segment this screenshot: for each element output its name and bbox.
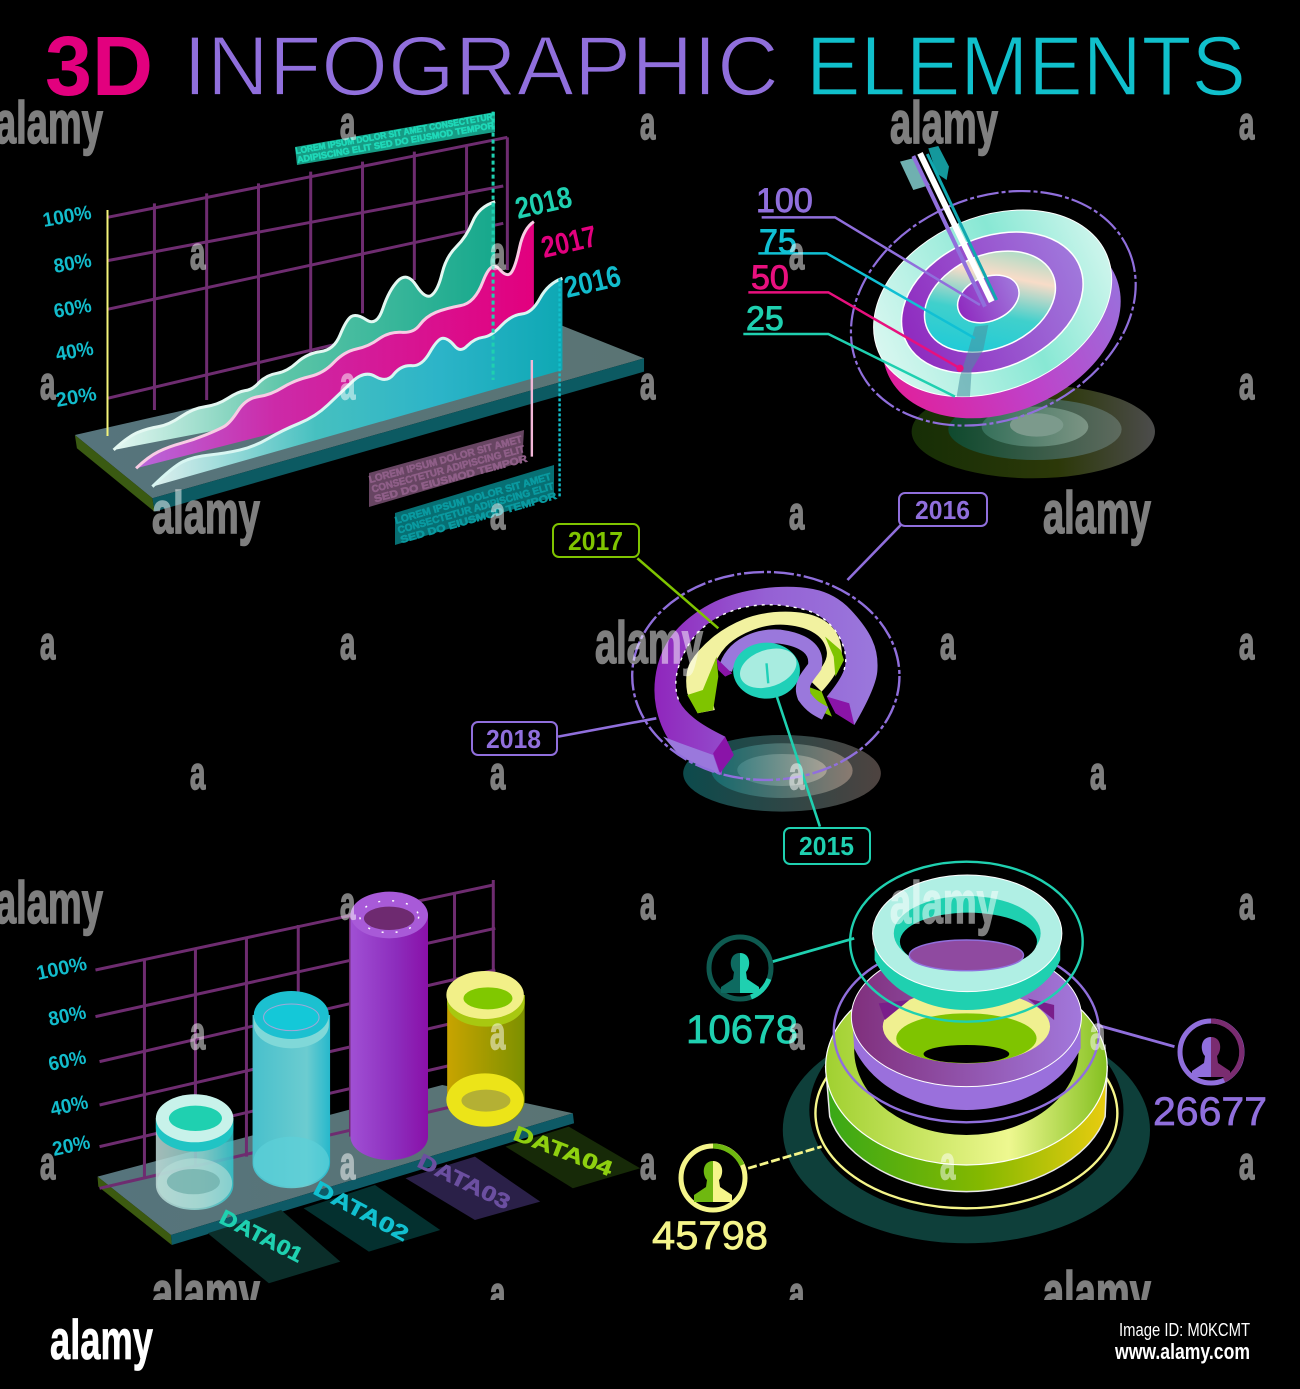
callout 10678: 10678	[686, 1008, 798, 1052]
bar chart grid	[95, 880, 495, 1188]
footer strip	[0, 1300, 1300, 1389]
watermark pattern: a	[490, 229, 506, 280]
watermark pattern: a	[640, 879, 656, 930]
watermark pattern: alamy	[1043, 1260, 1151, 1326]
bar chart base plate	[98, 1085, 574, 1245]
watermark pattern: a	[40, 1139, 56, 1190]
watermark pattern: a	[789, 749, 805, 800]
outer arc 2018/2016	[654, 587, 878, 775]
leader lines	[493, 112, 560, 497]
watermark pattern: alamy	[890, 870, 998, 936]
watermark pattern: a	[789, 229, 805, 280]
callout 26677	[1153, 1021, 1267, 1134]
year labels: 2016	[561, 260, 624, 305]
cylinder 3	[350, 892, 428, 1160]
axis labels	[41, 202, 98, 412]
caption 2017: SED DO EIUSMOD TEMPOR	[373, 453, 529, 505]
caption 2017: LOREM IPSUM DOLOR SIT AMET	[368, 434, 523, 486]
watermark pattern: a	[340, 619, 356, 670]
cylinder 1	[156, 1094, 233, 1210]
website: www.alamy.com	[1114, 1339, 1250, 1364]
panel: bar chart	[34, 880, 640, 1283]
watermark pattern: a	[340, 879, 356, 930]
callout 2015	[784, 828, 870, 864]
watermark pattern: a	[1239, 359, 1255, 410]
watermark pattern: a	[789, 489, 805, 540]
donut orbit ring	[632, 572, 899, 780]
year labels: 2018	[512, 181, 575, 226]
axis labels: 60%	[46, 1046, 88, 1076]
watermark pattern: alamy	[890, 90, 998, 156]
panel: bar chart: DATA01	[216, 1206, 307, 1267]
callout 2017	[553, 524, 639, 557]
watermark pattern: a	[40, 359, 56, 410]
bottom tier	[826, 965, 1107, 1192]
watermark pattern: a	[940, 619, 956, 670]
target shadow	[912, 385, 1155, 478]
watermark pattern: a	[340, 99, 356, 150]
watermark pattern: alamy	[595, 610, 703, 676]
axis labels	[34, 953, 92, 1161]
inner arc 2016	[717, 636, 825, 713]
year labels: 2017	[538, 220, 600, 265]
caption 2016: LOREM IPSUM DOLOR SIT AMET	[394, 472, 553, 527]
panel: bar chart: DATA03	[414, 1150, 514, 1214]
axis labels: 40%	[48, 1091, 90, 1121]
watermark pattern: a	[640, 359, 656, 410]
arrow	[900, 146, 997, 307]
watermark pattern: a	[340, 359, 356, 410]
leader lines	[743, 217, 980, 397]
callout 45798: 45798	[652, 1214, 768, 1258]
callout 26677: 26677	[1153, 1090, 1267, 1134]
caption 2016: SED DO EIUSMOD TEMPOR	[399, 491, 559, 546]
axis labels: 40%	[54, 338, 95, 366]
callout lines	[558, 525, 901, 827]
watermark pattern: a	[1239, 879, 1255, 930]
watermark pattern: a	[490, 489, 506, 540]
watermark pattern: a	[640, 99, 656, 150]
value labels	[746, 182, 813, 338]
watermark pattern: a	[1090, 749, 1106, 800]
watermark pattern: a	[640, 1139, 656, 1190]
title: ELEMENTS	[806, 19, 1246, 113]
watermark pattern: a	[789, 1009, 805, 1060]
area chart grid	[108, 137, 507, 410]
watermark pattern: a	[190, 229, 206, 280]
callout 2016	[899, 493, 987, 526]
middle tier	[851, 947, 1081, 1110]
watermark pattern: a	[490, 749, 506, 800]
donut shadow	[683, 735, 881, 812]
callout 10678	[686, 937, 798, 1052]
top tier	[873, 875, 1062, 1010]
caption 2018: LOREM IPSUM DOLOR SIT AMET CONSECTETUR	[295, 111, 494, 156]
title: INFOGRAPHIC	[183, 19, 779, 113]
caption 2016: CONSECTETUR ADIPISCING ELIT	[397, 481, 555, 536]
watermark pattern: a	[940, 1139, 956, 1190]
axis labels: 80%	[46, 1001, 88, 1031]
value labels: 100	[756, 182, 813, 220]
value labels: 75	[759, 223, 797, 261]
title	[45, 19, 1246, 113]
cylinder 4	[446, 971, 525, 1127]
watermark pattern: a	[1239, 99, 1255, 150]
purple orbit ring	[834, 941, 1099, 1122]
callout 2017: 2017	[568, 526, 623, 556]
series 2017 area	[136, 222, 534, 468]
axis labels: 100%	[41, 202, 93, 232]
title: 3D	[45, 19, 153, 113]
watermark pattern: a	[190, 1009, 206, 1060]
stack base shadow	[783, 1003, 1150, 1243]
target orbit ring	[814, 149, 1172, 468]
panel: target	[743, 146, 1172, 478]
series 2018 area	[114, 202, 495, 450]
caption 2016	[394, 465, 559, 546]
panel: donut chart	[472, 493, 987, 864]
watermark pattern: a	[190, 749, 206, 800]
watermark pattern: a	[789, 1269, 805, 1320]
image id: Image ID: M0KCMT	[1119, 1320, 1250, 1340]
bar labels on floor	[208, 1127, 640, 1283]
series 2016 area	[152, 278, 562, 487]
watermark pattern: a	[40, 619, 56, 670]
watermark pattern: a	[1090, 1009, 1106, 1060]
callout 2015: 2015	[799, 831, 854, 861]
panel: area chart	[41, 111, 644, 546]
axis labels: 100%	[34, 953, 89, 985]
footer logo: alamy	[50, 1308, 153, 1371]
callout 45798	[652, 1146, 768, 1258]
cylinder 2	[253, 991, 330, 1188]
value labels: 50	[751, 259, 789, 297]
target dish	[845, 175, 1150, 453]
axis labels: 20%	[50, 1131, 92, 1161]
panel: bar chart: DATA02	[310, 1177, 412, 1246]
teal orbit ring	[850, 862, 1083, 1022]
caption 2018: ADIPISCING ELIT SED DO EIUSMOD TEMPOR	[296, 120, 495, 165]
watermark pattern: a	[490, 1269, 506, 1320]
caption 2017	[368, 430, 529, 507]
yellow axis line	[106, 210, 108, 436]
panel: bar chart: DATA04	[510, 1122, 616, 1181]
middle arc 2017	[686, 612, 844, 717]
year labels	[512, 181, 624, 305]
axis labels: 60%	[52, 295, 93, 323]
axis labels: 80%	[52, 250, 93, 278]
watermark pattern: alamy	[1043, 480, 1151, 546]
callout lines	[748, 938, 1174, 1168]
callout 2016: 2016	[915, 495, 970, 525]
panel: stacked rings	[652, 862, 1267, 1258]
watermark pattern: alamy	[152, 1260, 260, 1326]
axis labels: 20%	[54, 383, 98, 412]
watermark pattern: a	[1239, 619, 1255, 670]
callout 2018: 2018	[486, 724, 541, 754]
value labels: 25	[746, 300, 784, 338]
center disc 2015	[733, 641, 802, 699]
callout 2018	[472, 722, 557, 755]
watermark pattern: a	[490, 1009, 506, 1060]
watermark pattern: a	[1239, 1139, 1255, 1190]
watermark pattern: a	[340, 1139, 356, 1190]
area chart base plate	[75, 325, 644, 512]
watermark pattern: alamy	[152, 480, 260, 546]
caption 2017: CONSECTETUR ADIPISCING ELIT	[371, 444, 526, 496]
